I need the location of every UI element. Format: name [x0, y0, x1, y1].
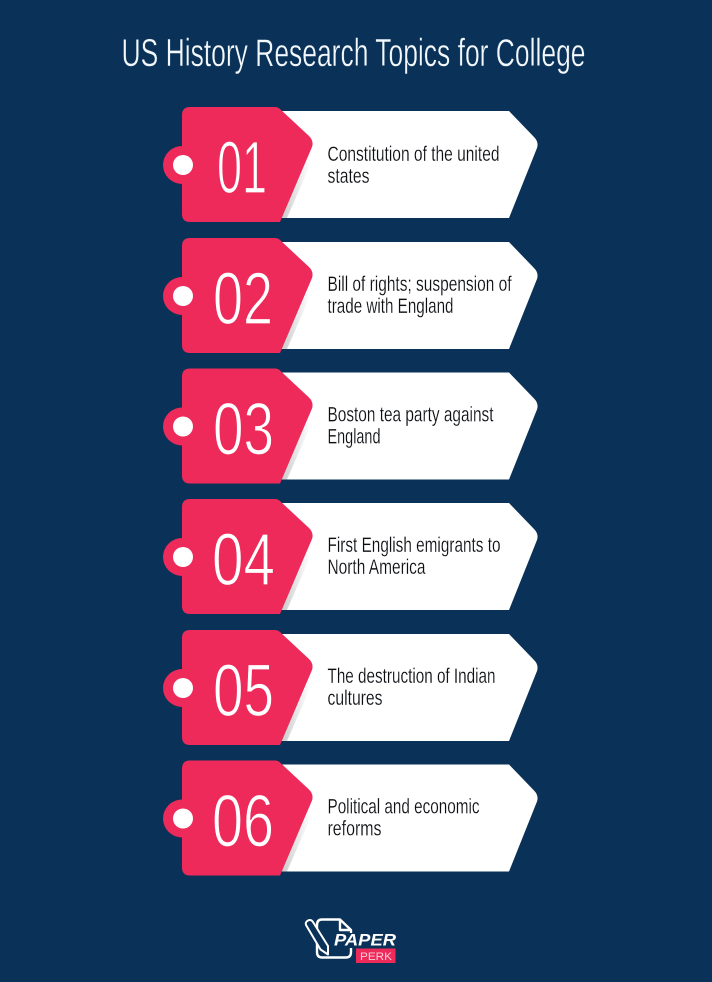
red tag 04: [163, 499, 313, 614]
logo word: PAPER: PAPER: [334, 932, 396, 950]
panel: topic 02: [163, 238, 538, 353]
white card 04: [272, 503, 538, 610]
text: topic 06: Political and economic: [328, 796, 480, 818]
white card 06: [272, 764, 538, 872]
number 05: 05: [213, 649, 274, 732]
number 04: 04: [212, 518, 275, 601]
panel: topic 06: [163, 760, 538, 876]
text: topic 04: First English emigrants to: [328, 534, 500, 557]
logo badge: PERK: PERK: [360, 951, 393, 963]
text: topic 04: North America: [328, 556, 426, 579]
number 03: 03: [213, 388, 274, 470]
number 01: 01: [217, 126, 267, 209]
text: topic 02: Bill of rights; suspension of: [328, 273, 512, 296]
text: topic 03: Boston tea party against: [328, 404, 494, 426]
number 02: 02: [213, 257, 273, 340]
text: topic 05: The destruction of Indian: [328, 665, 496, 688]
panel: topic 05: [163, 630, 538, 745]
text: topic 01: Constitution of the united: [328, 143, 500, 166]
text: topic 06: reforms: [328, 818, 382, 840]
red tag 03: [163, 368, 313, 484]
text: topic 02: trade with England: [328, 295, 454, 318]
red tag 05: [163, 630, 313, 745]
number 06: 06: [212, 780, 274, 862]
red tag 02: [163, 238, 313, 353]
text: topic 01: states: [328, 165, 370, 188]
white card 01: [272, 111, 538, 218]
text: topic 03: England: [328, 426, 380, 448]
panel: topic 03: [163, 368, 538, 484]
icon: pencil: [306, 920, 328, 954]
panel: topic 01: [163, 107, 538, 222]
white card 05: [272, 634, 538, 741]
white card 02: [272, 242, 538, 349]
white card 03: [272, 372, 538, 480]
panel: topic 04: [163, 499, 538, 614]
red tag 01: [163, 107, 313, 222]
text: topic 05: cultures: [328, 687, 382, 710]
icon: document: [317, 920, 351, 958]
logo: Paper Perk: [306, 920, 396, 963]
red tag 06: [163, 760, 313, 876]
